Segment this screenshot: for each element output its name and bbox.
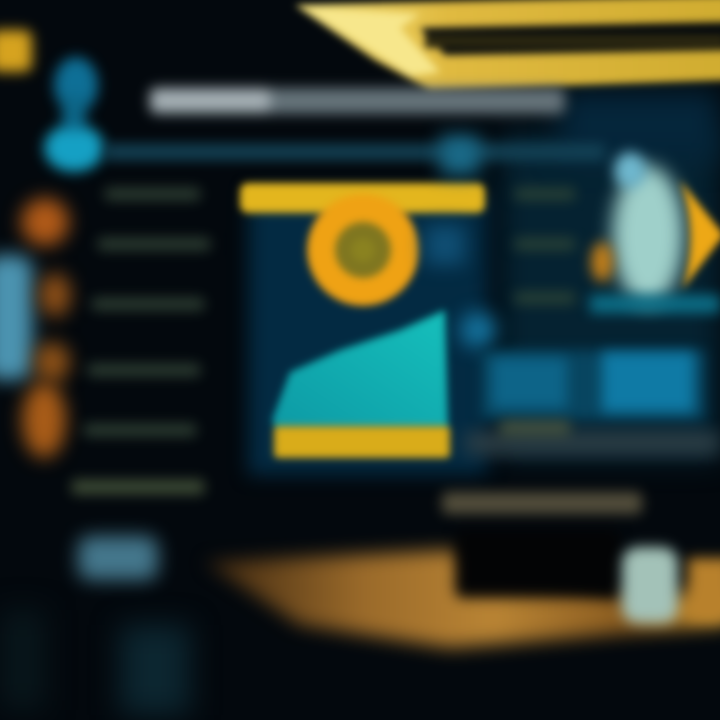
teal area chart (272, 310, 448, 428)
left orange and blue column (0, 198, 71, 458)
teal strip under pie (590, 295, 720, 313)
left yellow accent (0, 30, 32, 72)
desk (205, 550, 720, 648)
caption bar (442, 492, 642, 514)
title (150, 88, 565, 114)
yellow banner (240, 183, 485, 213)
panel: left list (72, 188, 210, 494)
list text lines (72, 188, 210, 494)
yellow footer bar (274, 426, 450, 458)
lower left shadows (0, 610, 190, 715)
orange object at right (688, 558, 720, 620)
panel: right list (515, 188, 575, 304)
blue accents by central panel (425, 135, 496, 348)
ceiling light (295, 0, 720, 90)
subtitle (105, 144, 605, 160)
panel: lower right chart (465, 350, 720, 454)
pale cup (622, 547, 678, 623)
icon: yellow coin (307, 194, 419, 306)
left blue blob (78, 536, 158, 580)
icon: blue hourglass (44, 57, 104, 172)
dark monitor stand (455, 530, 620, 598)
panel: central chart (240, 183, 488, 475)
icon: pale pie chart (591, 152, 720, 305)
